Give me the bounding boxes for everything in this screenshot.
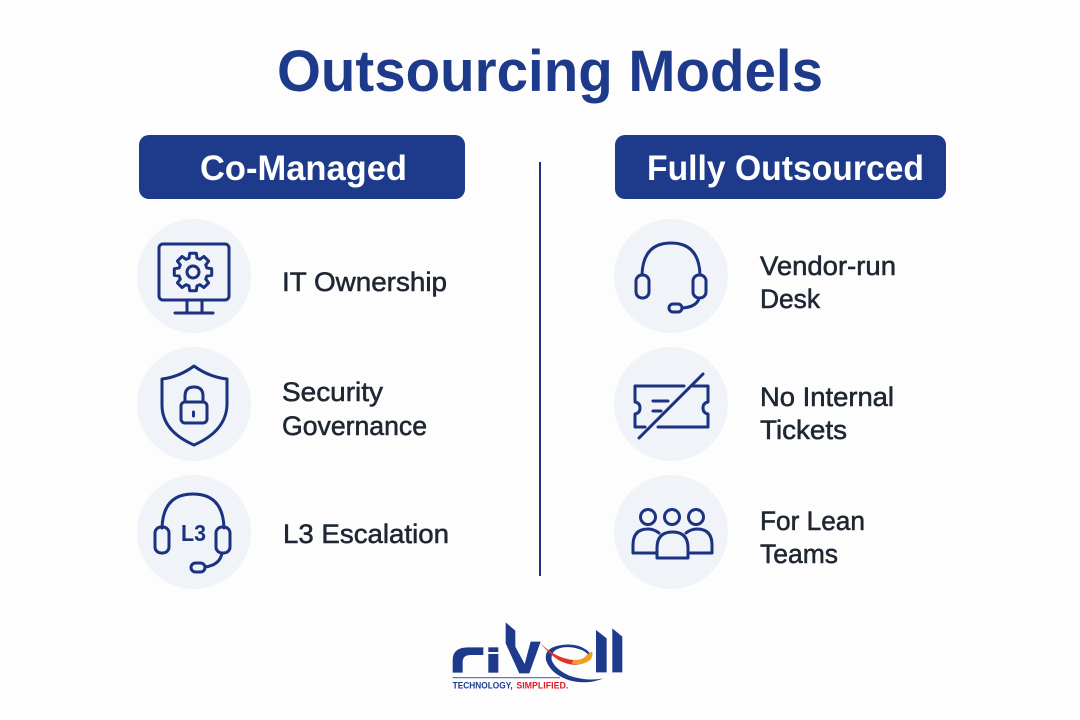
label: security governance xyxy=(282,377,427,441)
label: security governance: Security xyxy=(282,377,384,407)
label: for lean teams: Teams xyxy=(760,539,838,569)
label: vendor-run desk: Desk xyxy=(760,284,820,314)
logo: rivell: SIMPLIFIED. xyxy=(516,680,568,690)
panel: co-managed xyxy=(137,135,465,589)
icon: shield with padlock xyxy=(162,366,227,445)
item: no internal tickets xyxy=(614,347,894,461)
label: no internal tickets xyxy=(760,382,894,445)
label: for lean teams: For Lean xyxy=(760,506,865,536)
heading: fully outsourced xyxy=(615,135,946,199)
label: for lean teams xyxy=(760,506,865,569)
item: security governance xyxy=(137,347,427,461)
icon: headset with L3: L3 xyxy=(181,520,206,546)
icon: three people xyxy=(633,510,712,558)
label: IT ownership: IT Ownership xyxy=(282,267,447,297)
heading: co-managed: Co-Managed xyxy=(200,149,407,188)
icon: crossed-out ticket xyxy=(635,374,708,438)
label: L3 escalation: L3 Escalation xyxy=(283,519,449,549)
item: IT ownership xyxy=(137,219,447,333)
label: vendor-run desk: Vendor-run xyxy=(760,251,896,281)
icon: headset with L3 xyxy=(155,494,230,572)
icon: headset xyxy=(636,243,706,312)
title: Outsourcing Models xyxy=(277,39,823,104)
label: no internal tickets: No Internal xyxy=(760,382,894,412)
icon: monitor with gear xyxy=(159,244,229,313)
logo: rivell xyxy=(453,622,622,690)
heading: co-managed xyxy=(139,135,465,199)
item: for lean teams xyxy=(614,475,865,589)
logo: rivell: TECHNOLOGY, xyxy=(453,680,513,690)
item: L3 escalation xyxy=(137,475,449,589)
label: security governance: Governance xyxy=(282,411,427,441)
heading: fully outsourced: Fully Outsourced xyxy=(647,149,924,188)
label: vendor-run desk xyxy=(760,251,896,314)
divider line between models xyxy=(539,162,541,576)
panel: fully outsourced xyxy=(614,135,946,589)
item: vendor-run desk xyxy=(614,219,896,333)
label: no internal tickets: Tickets xyxy=(760,415,847,445)
